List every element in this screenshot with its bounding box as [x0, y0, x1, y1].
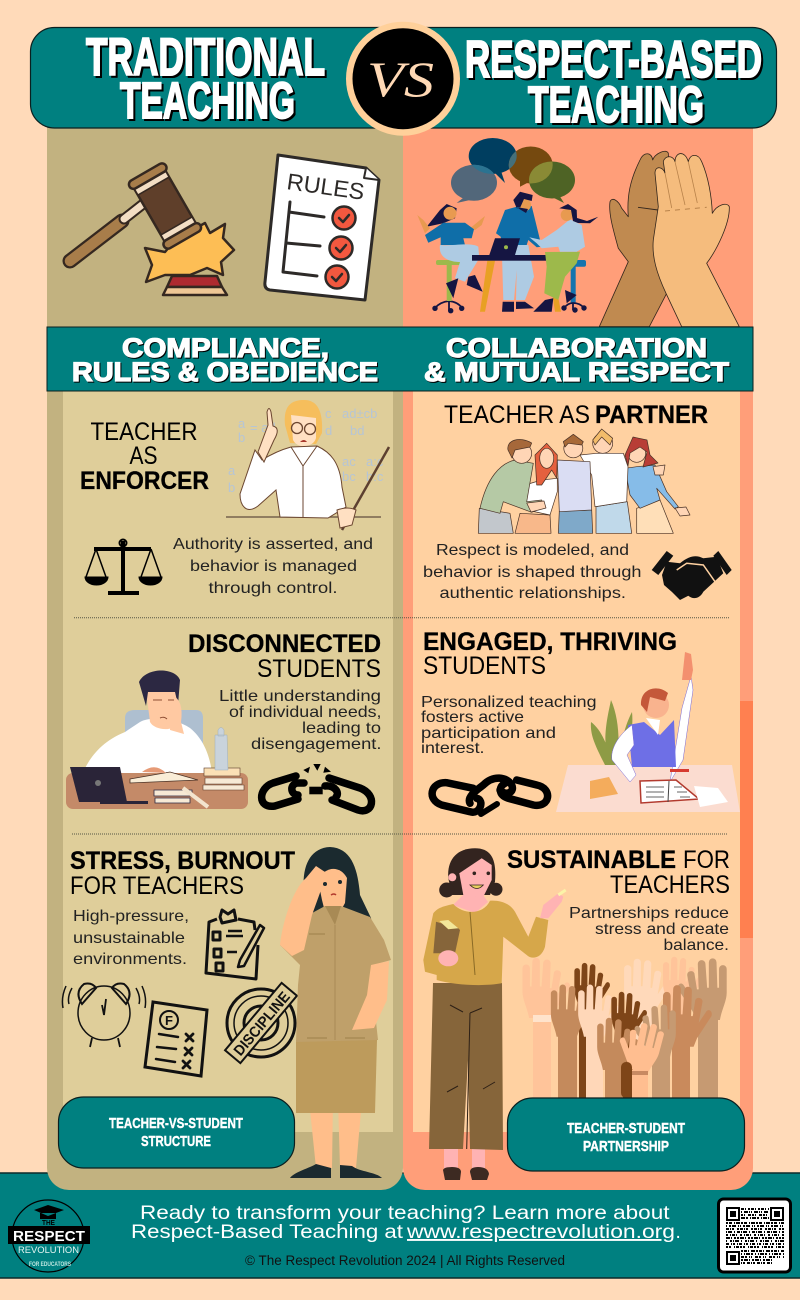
heading: compliance: RULES & OBEDIENCE [72, 357, 378, 387]
desk [66, 773, 248, 809]
heading: disconnected students: STUDENTS [257, 655, 381, 683]
desk line [226, 516, 381, 518]
heading: engaged thriving [423, 628, 677, 680]
callout: teacher-vs-student structure: STRUCTURE [141, 1133, 211, 1150]
text: disconnected: leading to [302, 720, 381, 737]
table top [472, 255, 577, 261]
heading: sustainable [507, 846, 730, 899]
footer: call to action: . [676, 1222, 681, 1243]
text: stress: High-pressure, [73, 908, 189, 925]
leftmost peach hand [522, 958, 570, 1098]
icon: failed test paper: F [165, 1013, 173, 1028]
laptop [70, 767, 127, 802]
legs [309, 1100, 362, 1168]
chalkboard maths: ac [342, 454, 356, 469]
heading: teacher as partner: PARTNER [595, 401, 708, 429]
footer: call to action: Ready to transform your teaching? Learn more about [140, 1203, 670, 1224]
books stack [203, 778, 244, 790]
pale hand [578, 984, 619, 1098]
footer: logo: THE [42, 1220, 55, 1227]
footer: logo: REVOLUTION [18, 1245, 79, 1256]
footer: logo [8, 1200, 90, 1272]
text: authority: Authority is asserted, and [173, 536, 373, 553]
left stool [435, 301, 462, 311]
heading: teacher as enforcer: ENFORCER [80, 467, 209, 495]
head [127, 162, 203, 250]
text: respect: behavior is shaped through [423, 564, 642, 581]
dark brown hand [574, 963, 610, 1098]
neck [453, 895, 488, 913]
chalkboard maths: c [325, 406, 332, 421]
heading: traditional teaching [86, 28, 325, 129]
callout: teacher-student partnership: PARTNERSHIP [583, 1138, 669, 1155]
callout: teacher-student partnership [508, 1098, 744, 1171]
decorative orange stripe [740, 701, 753, 938]
icon: discipline stamp: DISCIPLINE [231, 989, 294, 1059]
text: sustainable: stress and create [595, 921, 729, 938]
heading: sustainable: SUSTAINABLE [507, 846, 676, 874]
head [643, 692, 669, 718]
dark hand rear [611, 992, 647, 1098]
heading: disconnected students [188, 630, 381, 683]
tan right hand [678, 958, 727, 1098]
hair [304, 847, 372, 930]
icon: clipboard [206, 910, 264, 979]
heading: sustainable: TEACHERS [610, 871, 730, 899]
cardigan [423, 901, 548, 985]
plant [591, 700, 632, 765]
face [459, 858, 492, 897]
brown left hand [551, 984, 592, 1098]
far back hands [624, 957, 702, 1056]
gavel base [167, 276, 222, 287]
illustration: group of friends [478, 429, 690, 533]
footer: qr code [718, 1199, 790, 1272]
speech bubbles [451, 138, 575, 203]
callout: teacher-student partnership: TEACHER-STUDENT [567, 1120, 685, 1137]
text: engaged: interest. [421, 740, 484, 757]
heading: teacher as enforcer: AS [130, 442, 158, 470]
vs badge: VS [367, 51, 434, 107]
footer band [0, 1173, 800, 1278]
footer: call to action: Respect-Based Teaching at [131, 1222, 404, 1243]
white top woman [525, 478, 557, 515]
seated woman [427, 204, 457, 227]
arm raised [670, 676, 693, 782]
illustration: stressed teacher [280, 847, 391, 1178]
text: respect [423, 542, 642, 602]
bottle [215, 728, 228, 770]
heading: teacher as enforcer: TEACHER [90, 418, 198, 446]
divider: row two [72, 833, 727, 835]
heading: collaboration: COLLABORATION [446, 333, 707, 363]
illustration: raised diverse hands [522, 957, 727, 1098]
paper [694, 786, 728, 807]
notepad [590, 777, 618, 799]
book [433, 922, 460, 953]
text: stress: unsustainable [73, 930, 185, 947]
heading: compliance: COMPLIANCE, [122, 333, 329, 363]
right arm [352, 961, 389, 1030]
chalkboard maths: = ad [250, 420, 276, 435]
shoes [290, 1164, 382, 1178]
footer: logo: FOR EDUCATORS [29, 1262, 71, 1268]
chalkboard maths: bc [342, 469, 356, 484]
chalkboard maths: bd [350, 423, 364, 438]
handle [70, 221, 122, 261]
footer: call to action: www.respectrevolution.org [406, 1222, 675, 1243]
skirt [296, 1040, 377, 1113]
pointer hand [337, 508, 356, 528]
legs [444, 1148, 485, 1170]
text: respect: authentic relationships. [440, 585, 626, 602]
text: sustainable: balance. [664, 937, 729, 954]
heading: engaged thriving: STUDENTS [423, 652, 546, 680]
band: section headings [47, 327, 753, 391]
icon: rules checklist [265, 155, 379, 300]
left arm [612, 725, 636, 782]
chalkboard maths: d [325, 423, 332, 438]
heading: stress burnout: FOR TEACHERS [70, 872, 244, 900]
heading: teacher as partner [444, 401, 708, 429]
shirt [240, 446, 346, 518]
white tee man [580, 453, 628, 507]
face [291, 415, 316, 446]
icon: broken chain [262, 764, 372, 811]
hair [448, 848, 495, 895]
text: engaged: Personalized teaching [421, 694, 596, 711]
icon: failed test paper [145, 1002, 207, 1076]
holding hand [438, 950, 458, 966]
heading: sustainable: FOR [683, 846, 730, 874]
text: engaged: participation and [421, 725, 556, 742]
icon: gavel [70, 162, 234, 295]
chalkboard maths: ad±cb [342, 406, 377, 421]
heading: collaboration [424, 333, 730, 387]
text: stress: environments. [73, 951, 187, 968]
icon: scales [85, 540, 162, 593]
laptop [489, 238, 520, 255]
right woman [544, 252, 580, 300]
icon: rules checklist: RULES [285, 168, 366, 205]
text: sustainable: Partnerships reduce [569, 905, 729, 922]
text: disconnected: of individual needs, [229, 704, 382, 721]
standing man [502, 245, 534, 300]
divider: row one [74, 617, 730, 619]
neck face [318, 869, 347, 912]
open book [130, 772, 198, 783]
illustration: collaborating team [417, 138, 598, 313]
brown right hand [663, 985, 712, 1098]
peach front hand [613, 1017, 666, 1098]
illustration: smiling teacher [423, 848, 566, 1180]
heading: respect-based teaching [465, 31, 762, 133]
text: disconnected [219, 688, 382, 753]
callout: teacher-vs-student structure [58, 1097, 294, 1168]
panel: respect-based inner background [413, 391, 740, 1132]
illustration: disengaged student at desk [66, 670, 248, 809]
chalkboard maths [228, 406, 384, 495]
head [146, 690, 178, 729]
heading: respect-based teaching: TEACHING [528, 76, 704, 133]
brown front hand [597, 1018, 638, 1098]
chalkboard maths: b [228, 480, 235, 495]
icon: alarm clock [62, 984, 146, 1047]
footer: call to action [131, 1203, 681, 1243]
open book [640, 780, 699, 803]
text: authority [173, 536, 373, 597]
sweater vest [628, 720, 676, 767]
heading: compliance [72, 333, 378, 387]
header banner [30, 28, 776, 128]
green sweater man [480, 460, 544, 513]
vs badge [346, 22, 460, 136]
icon: linked chain [432, 778, 548, 814]
right stool [570, 260, 586, 267]
heading: engaged thriving: ENGAGED, THRIVING [423, 628, 677, 656]
red pen [670, 769, 689, 772]
trousers [429, 983, 503, 1150]
tan mid hand [635, 1004, 676, 1098]
illustration: student raising hand [556, 652, 740, 812]
heading: disconnected students: DISCONNECTED [188, 630, 381, 658]
hair [285, 400, 322, 444]
chalkboard maths: b [238, 430, 245, 445]
footer: logo: RESPECT [13, 1228, 85, 1245]
legs [478, 508, 513, 533]
heading: traditional teaching: TRADITIONAL [86, 28, 325, 87]
footer: copyright: © The Respect Revolution 2024 | All Rights Reserved [245, 1253, 565, 1268]
heading: teacher as enforcer [80, 418, 209, 495]
chalkboard maths: a [238, 416, 246, 431]
callout: teacher-vs-student structure: TEACHER-VS-STUDENT [109, 1115, 243, 1132]
chalkboard maths: a [228, 463, 236, 478]
panel: traditional inner background [63, 391, 393, 1132]
text: disconnected: Little understanding [219, 688, 381, 705]
chair [125, 710, 203, 750]
blue sweater woman [625, 465, 678, 509]
pointer [342, 447, 389, 530]
sweater [82, 719, 212, 775]
text: engaged: fosters active [421, 709, 524, 726]
heading: stress burnout [70, 847, 295, 900]
text: stress [73, 908, 189, 968]
text: sustainable [569, 905, 729, 954]
raised hand [258, 408, 277, 462]
blouse [280, 906, 391, 1042]
text: engaged [421, 694, 596, 757]
pencil [183, 788, 208, 807]
heading: traditional teaching: TEACHING [120, 72, 295, 129]
shoes [443, 1167, 489, 1180]
heading: stress burnout: STRESS, BURNOUT [70, 847, 295, 875]
panel: traditional teaching [47, 120, 403, 1190]
chalkboard maths: b:c [366, 469, 384, 484]
arm on head [280, 866, 325, 956]
illustration: strict teacher [226, 400, 389, 530]
chalkboard maths: a:c [366, 454, 384, 469]
text: disconnected: disengagement. [251, 736, 382, 753]
lavender tee [557, 460, 592, 512]
heading: collaboration: & MUTUAL RESPECT [424, 357, 730, 387]
text: authority: through control. [208, 580, 338, 597]
table legs [480, 261, 561, 312]
text: respect: Respect is modeled, and [436, 542, 629, 559]
pointing hand [540, 893, 563, 918]
desk [556, 765, 740, 812]
burst [145, 223, 234, 282]
illustration: high five hands [599, 151, 739, 327]
heading: teacher as partner: TEACHER AS [444, 401, 590, 429]
panel: respect-based teaching [403, 120, 753, 1190]
icon: handshake [652, 551, 732, 600]
text: authority: behavior is managed [190, 558, 357, 575]
